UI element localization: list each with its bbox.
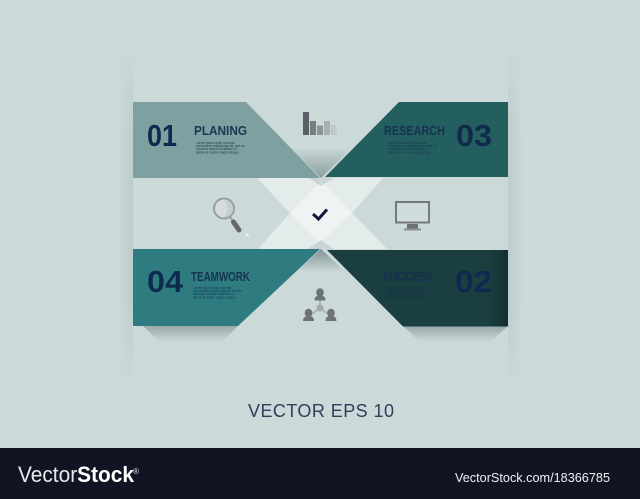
body text success: Lorem ipsum dolor sit amet, bbox=[386, 286, 425, 290]
panel: 02 success bbox=[327, 250, 508, 326]
body text planing: labore et dolore magna aliqua. bbox=[196, 150, 239, 154]
body text teamwork: eiusmod tempor incididunt ut bbox=[193, 292, 234, 296]
centre white cross bbox=[257, 178, 387, 249]
panel: 01 planing bbox=[133, 102, 320, 178]
body text success bbox=[386, 286, 435, 300]
body text teamwork: consectetur adipisicing elit, sed do bbox=[193, 289, 242, 293]
registered mark: ® bbox=[133, 467, 139, 476]
icon: people network bbox=[303, 288, 336, 321]
number 02: 02 bbox=[455, 264, 492, 299]
lower band shadows bbox=[143, 326, 508, 342]
body text success: eiusmod tempor incididunt ut bbox=[386, 292, 427, 296]
icon: computer monitor bbox=[396, 202, 429, 230]
body text teamwork: Lorem ipsum dolor sit amet, bbox=[193, 286, 232, 290]
body text research: labore et dolore magna aliqua. bbox=[388, 150, 431, 154]
body text research: Lorem ipsum dolor sit amet, bbox=[388, 141, 427, 145]
panel: 04 teamwork bbox=[133, 249, 320, 326]
body text research bbox=[388, 141, 437, 154]
page fold shadows bbox=[126, 94, 516, 340]
heading success: SUCCESS bbox=[383, 270, 433, 284]
body text planing: Lorem ipsum dolor sit amet, bbox=[196, 141, 235, 145]
icon: check mark bbox=[313, 210, 327, 219]
footer bar bbox=[0, 448, 640, 499]
footer logo: VectorStock bbox=[18, 462, 134, 487]
icon: magnifying glass bbox=[214, 198, 249, 236]
footer url: VectorStock.com/18366785 bbox=[455, 471, 610, 485]
heading research: RESEARCH bbox=[384, 124, 445, 138]
body text research: eiusmod tempor incididunt ut bbox=[388, 147, 429, 151]
number 03: 03 bbox=[456, 118, 492, 153]
body text teamwork bbox=[193, 286, 242, 300]
icon: bar chart bbox=[303, 112, 337, 135]
number 01: 01 bbox=[147, 118, 177, 153]
body text planing: consectetur adipisicing elit, sed do bbox=[196, 144, 245, 148]
title: vector eps 10: VECTOR EPS 10 bbox=[248, 401, 394, 421]
number 04: 04 bbox=[147, 264, 184, 299]
body text planing bbox=[196, 141, 245, 154]
body text teamwork: labore et dolore magna aliqua. bbox=[193, 296, 236, 300]
centre fold shadows bbox=[238, 102, 403, 326]
body text research: consectetur adipisicing elit, sed do bbox=[388, 144, 437, 148]
panel: 03 research bbox=[325, 102, 508, 177]
body text success: labore et dolore magna aliqua. bbox=[386, 296, 429, 300]
heading teamwork: TEAMWORK bbox=[191, 270, 250, 284]
body text planing: eiusmod tempor incididunt ut bbox=[196, 147, 237, 151]
body text success: consectetur adipisicing elit, sed do bbox=[386, 290, 435, 294]
heading planing: PLANING bbox=[194, 124, 247, 138]
